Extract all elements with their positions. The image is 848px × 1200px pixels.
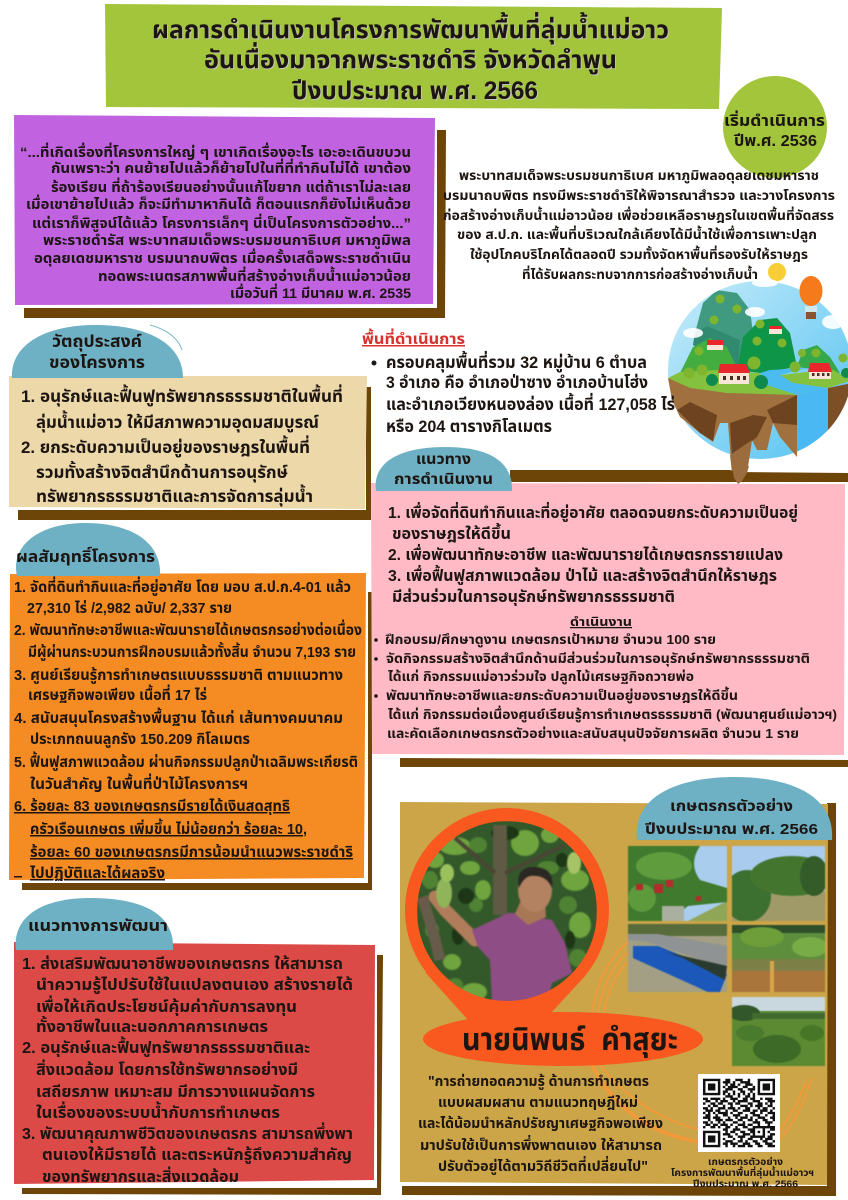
text block: implementation bullets: ได้แก่ กิจกรรมต่อเนื่องศูนย์เรียนรู้การทำเกษตรธรรมชาติ (พัฒนาศูนย์แม่อาวฯ): [388, 705, 837, 723]
text block: objectives list: 2. ยกระดับความเป็นอยู่ของราษฎรในพื้นที่: [21, 435, 310, 458]
text block: royal quote: กันเพราะว่า คนย้ายไปแล้วก็ย้ายไปในที่ที่ทำกินไม่ได้ เขาต้อง: [51, 158, 411, 176]
text block: results list: 2. พัฒนาทักษะอาชีพและพัฒนารายได้เกษตรกรอย่างต่อเนื่อง: [14, 619, 362, 639]
icon: QR code: [698, 1074, 780, 1152]
text block: farmer quote: ปรับตัวอยู่ได้ตามวิถีชีวิตที่เปลี่ยนไป": [438, 1155, 648, 1176]
text block: royal initiative: ก่อสร้างอ่างเก็บน้ำแม่อาวน้อย เพื่อช่วยเหลือราษฎรในเขตพื้นที่จัดสรร: [443, 206, 834, 223]
text block: royal quote: แต่เราก็พิสูจน์ได้แล้ว โครงการเล็กๆ นี่เป็นโครงการตัวอย่าง...”: [32, 213, 411, 233]
text block: approach goals: 2. เพื่อพัฒนาทักษะอาชีพ และพัฒนารายได้เกษตรกรรายแปลง: [388, 543, 783, 564]
tab: results heading: ผลสัมฤทธิ์โครงการ: [16, 546, 155, 566]
text block: development list: สิ่งแวดล้อม โดยการใช้ทรัพยากรอย่างมี: [36, 1059, 298, 1079]
photo: orchard with fruit: [627, 845, 728, 922]
panel: model farmer: [400, 777, 836, 1196]
text block: development list: นำความรู้ไปปรับใช้ในแปลงตนเอง สร้างรายได้: [36, 976, 353, 995]
title: อันเนื่องมาจากพระราชดำริ จังหวัดลำพูน: [204, 42, 617, 75]
heading: implementation: ดำเนินงาน: [570, 615, 632, 629]
text block: implementation bullets: [374, 632, 837, 741]
island drip tip over panel: [732, 466, 749, 484]
text block: results list: ประเภทถนนลูกรัง 150.209 กิโลเมตร: [30, 731, 250, 749]
photo: young orchard: [731, 996, 826, 1067]
text block: royal initiative: ที่ได้รับผลกระทบจากการก่อสร้างอ่างเก็บน้ำ: [522, 265, 758, 282]
text block: royal initiative: ใช้อุปโภคบริโภคได้ตลอดปี รวมทั้งจัดหาพื้นที่รองรับให้ราษฎร: [470, 245, 808, 262]
text block: results list: 5. ฟื้นฟูสภาพแวดล้อม ผ่านกิจกรรมปลูกป่าเฉลิมพระเกียรติ: [14, 751, 358, 772]
panel: operation approach: [371, 447, 848, 767]
text block: royal quote: [20, 142, 411, 301]
text block: farmer quote: มาปรับใช้เป็นการพึ่งพาตนเอง ให้สามารถ: [420, 1134, 662, 1154]
illustration: floating island globe: [660, 263, 848, 483]
panel: development guidelines: [14, 898, 383, 1195]
text block: results list: ร้อยละ 60 ของเกษตรกรมีการน้อมนำแนวพระราชดำริ: [30, 843, 353, 861]
text block: development list: 2. อนุรักษ์และฟื้นฟูทรัพยากรธรรมชาติและ: [22, 1036, 310, 1058]
photo: trees and field: [731, 845, 826, 922]
text block: development list: เสถียรภาพ เหมาะสม มีการวางแผนจัดการ: [36, 1084, 315, 1101]
text block: results list: 27,310 ไร่ /2,982 ฉบับ/ 2,337 ราย: [27, 599, 232, 617]
panel: title banner: [105, 4, 722, 109]
text block: development list: เพื่อให้เกิดประโยชน์คุ้มค่ากับการลงทุน: [36, 995, 297, 1016]
text block: QR caption: [671, 1156, 814, 1190]
text block: development list: [22, 955, 353, 1186]
panel: royal quote: [14, 115, 446, 318]
text block: results list: เศรษฐกิจพอเพียง เนื้อที่ 17 ไร่: [28, 684, 207, 704]
text block: objectives list: รวมทั้งสร้างจิตสำนึกด้านการอนุรักษ์: [36, 461, 288, 483]
icon: sun: [768, 263, 786, 281]
houses: [707, 326, 832, 384]
text block: objectives list: 1. อนุรักษ์และฟื้นฟูทรัพยากรธรรมชาติในพื้นที่: [21, 384, 343, 407]
icon: hot air balloon: [800, 276, 822, 319]
tab: development heading: [16, 898, 173, 950]
text block: QR caption: เกษตรกรตัวอย่าง: [708, 1156, 784, 1168]
text block: farmer quote: "การถ่ายทอดความรู้ ด้านการทำเกษตร: [428, 1073, 649, 1091]
text block: area details: 3 อำเภอ คือ อำเภอป่าซาง อำเภอบ้านโฮ่ง: [386, 373, 648, 392]
text block: implementation bullets: พัฒนาทักษะอาชีพและยกระดับความเป็นอยู่ของราษฎรให้ดีขึ้น: [386, 686, 738, 704]
text block: royal quote: เมื่อวันที่ 11 มีนาคม พ.ศ. 2535: [230, 283, 411, 301]
text block: farmer quote: แบบผสมผสาน ตามแนวทฤษฎีใหม่: [438, 1094, 638, 1111]
title: ผลการดำเนินงานโครงการพัฒนาพื้นที่ลุ่มน้ำแม่อาว: [152, 12, 669, 45]
tab: results heading: [16, 523, 160, 576]
text block: approach goals: ของราษฎรให้ดีขึ้น: [392, 522, 511, 543]
island rock: [668, 378, 797, 483]
text block: results list: ไปปฏิบัติและได้ผลจริง: [30, 864, 165, 882]
text block: implementation bullets: ได้แก่ กิจกรรมแม่อาวร่วมใจ ปลูกไม้เศรษฐกิจถวายพ่อ: [388, 669, 694, 685]
clouds: [679, 279, 844, 338]
text block: development list: 3. พัฒนาคุณภาพชีวิตของเกษตรกร สามารถพึ่งพา: [22, 1122, 353, 1143]
text block: royal initiative: ของ ส.ป.ก. และพื้นที่บริเวณใกล้เคียงได้มีน้ำใช้เพื่อการเพาะปลูก: [457, 225, 817, 243]
text block: approach goals: มีส่วนร่วมในการอนุรักษ์ทรัพยากรธรรมชาติ: [392, 588, 675, 606]
tab: objectives heading: [12, 325, 183, 378]
text block: QR caption: ปีงบประมาณ พ.ศ. 2566: [692, 1179, 798, 1190]
text block: results list: ครัวเรือนเกษตร เพิ่มขึ้น ไม่น้อยกว่า ร้อยละ 10,: [30, 818, 307, 838]
tab: objectives heading: วัตถุประสงค์: [52, 332, 142, 352]
text block: results list: มีผู้ผ่านกระบวนการฝึกอบรมแล้วทั้งสิ้น จำนวน 7,193 ราย: [28, 642, 356, 662]
photos: farm gallery: [628, 846, 834, 1066]
photo: blue fish pond: [627, 923, 728, 993]
text block: approach goals: [388, 501, 798, 606]
text block: farmer quote: และได้น้อมนำหลักปรัชญาเศษฐกิจพอเพียง: [418, 1116, 663, 1132]
text block: results list: 3. ศูนย์เรียนรู้การทำเกษตรแบบธรรมชาติ ตามแนวทาง: [14, 666, 343, 685]
panel: results: [9, 523, 372, 890]
tab: approach heading: แนวทาง: [416, 451, 471, 468]
tab: approach heading: การดำเนินงาน: [394, 471, 493, 488]
text block: development list: ทั้งอาชีพในและนอกภาคการเกษตร: [36, 1016, 268, 1036]
text block: farmer quote: [418, 1073, 663, 1176]
panel: objectives: [9, 325, 371, 520]
text block: royal quote: อดุลยเดชมหาราช บรมนาถบพิตร เมื่อครั้งเสด็จพระราชดำเนิน: [34, 248, 411, 267]
text block: development list: ของทรัพยากรและสิ่งแวดล้อม: [42, 1166, 239, 1186]
text block: royal initiative: พระบาทสมเด็จพระบรมชนกาธิเบศ มหาภูมิพลอดุลยเดชมหาราช: [459, 168, 819, 184]
heading: area: พื้นที่ดำเนินการ: [362, 328, 465, 348]
text block: objectives list: ทรัพยากรธรรมชาติและการจัดการลุ่มน้ำ: [36, 484, 313, 507]
tab: objectives heading: ของโครงการ: [49, 353, 145, 372]
name ribbon: นายนิพนธ์ คำสุยะ: [462, 1022, 678, 1058]
tab: model farmer heading: ปีงบประมาณ พ.ศ. 2566: [644, 821, 818, 838]
text block: QR caption: โครงการพัฒนาพื้นที่ลุ่มน้ำแม่อาวฯ: [671, 1166, 814, 1179]
text block: royal initiative: [443, 168, 835, 282]
text block: objectives list: ลุ่มน้ำแม่อาว ให้มีสภาพความอุดมสมบูรณ์: [36, 410, 319, 433]
tab: model farmer heading: [637, 777, 832, 840]
badge: project start year: ปีพ.ศ. 2536: [733, 133, 817, 150]
text block: area details: ครอบคลุมพื้นที่รวม 32 หมู่บ้าน 6 ตำบล: [386, 350, 647, 373]
text block: royal quote: พระราชดำรัส พระบาทสมเด็จพระบรมชนกาธิเบศ มหาภูมิพล: [43, 232, 411, 250]
text block: development list: ในเรื่องของระบบน้ำกับการทำเกษตร: [36, 1101, 280, 1122]
text block: area details: [372, 350, 675, 436]
text block: development list: 1. ส่งเสริมพัฒนาอาชีพของเกษตรกร ให้สามารถ: [22, 955, 343, 973]
text block: royal quote: “...ที่เกิดเรื่องที่โครงการใหญ่ ๆ เขาเกิดเรื่องอะไร เอะอะเดินขบวน: [20, 142, 411, 160]
text block: royal quote: ร้องเรียน ที่ถ้าร้องเรียนอย่างนั้นแก้ไขยาก แต่ถ้าเราไม่ละเลย: [51, 177, 411, 195]
text block: approach goals: 1. เพื่อจัดที่ดินทำกินและที่อยู่อาศัย ตลอดจนยกระดับความเป็นอยู่: [388, 501, 798, 523]
text block: royal quote: เมื่อเขาย้ายไปแล้ว ก็จะมีทำมาหากินได้ ก็ตอนแรกก็ยังไม่เห็นด้วย: [26, 194, 411, 212]
text block: results list: [14, 576, 362, 882]
icon: portrait pin: [405, 808, 609, 1020]
text block: development list: ตนเองให้มีรายได้ และตระหนักรู้ถึงความสำคัญ: [42, 1146, 352, 1165]
text block: results list: ในวันสำคัญ ในพื้นที่ป่าไม้โครงการฯ: [30, 773, 248, 793]
tab: approach heading: [376, 447, 512, 491]
text block: royal initiative: บรมนาถบพิตร ทรงมีพระราชดำริให้พิจารณาสำรวจ และวางโครงการ: [443, 188, 835, 203]
tab: model farmer heading: เกษตรกรตัวอย่าง: [670, 797, 793, 815]
badge: project start year: เริ่มดำเนินการ: [724, 110, 825, 130]
tab: development heading: แนวทางการพัฒนา: [28, 918, 168, 935]
text block: results list: 4. สนับสนุนโครงสร้างพื้นฐาน ได้แก่ เส้นทางคมนาคม: [14, 707, 343, 727]
text block: area details: และอำเภอเวียงหนองล่อง เนื้อที่ 127,058 ไร่: [386, 392, 675, 414]
text block: objectives list: [21, 384, 343, 507]
text block: implementation bullets: และคัดเลือกเกษตรกรตัวอย่างและสนับสนุนปัจจัยการผลิต จำนวน 1 ราย: [387, 726, 799, 741]
decorative swoosh: [592, 942, 812, 1142]
text block: area details: หรือ 204 ตารางกิโลเมตร: [386, 418, 552, 436]
text block: implementation bullets: จัดกิจกรรมสร้างจิตสำนึกด้านมีส่วนร่วมในการอนุรักษ์ทรัพยากรธรรมชาติ: [386, 651, 810, 666]
text block: implementation bullets: ฝึกอบรม/ศึกษาดูงาน เกษตรกรเป้าหมาย จำนวน 100 ราย: [385, 632, 716, 648]
text block: royal quote: ทอดพระเนตรสภาพพื้นที่สร้างอ่างเก็บน้ำแม่อาวน้อย: [98, 266, 411, 284]
text block: results list: 6. ร้อยละ 83 ของเกษตรกรมีรายได้เงินสดสุทธิ: [14, 797, 290, 815]
trees: [684, 294, 848, 389]
title: [152, 12, 669, 105]
area of operation: [362, 328, 675, 436]
photo: farmer with mangoes: [417, 821, 597, 1003]
title: ปีงบประมาณ พ.ศ. 2566: [292, 77, 538, 105]
photo: garden beds: [731, 924, 826, 992]
name ribbon: [423, 1012, 703, 1066]
text block: approach goals: 3. เพื่อฟื้นฟูสภาพแวดล้อม ป่าไม้ และสร้างจิตสำนึกให้ราษฎร: [388, 564, 777, 586]
badge: project start year: [723, 76, 827, 178]
text block: results list: 1. จัดที่ดินทำกินและที่อยู่อาศัย โดย มอบ ส.ป.ก.4-01 แล้ว: [14, 576, 351, 597]
